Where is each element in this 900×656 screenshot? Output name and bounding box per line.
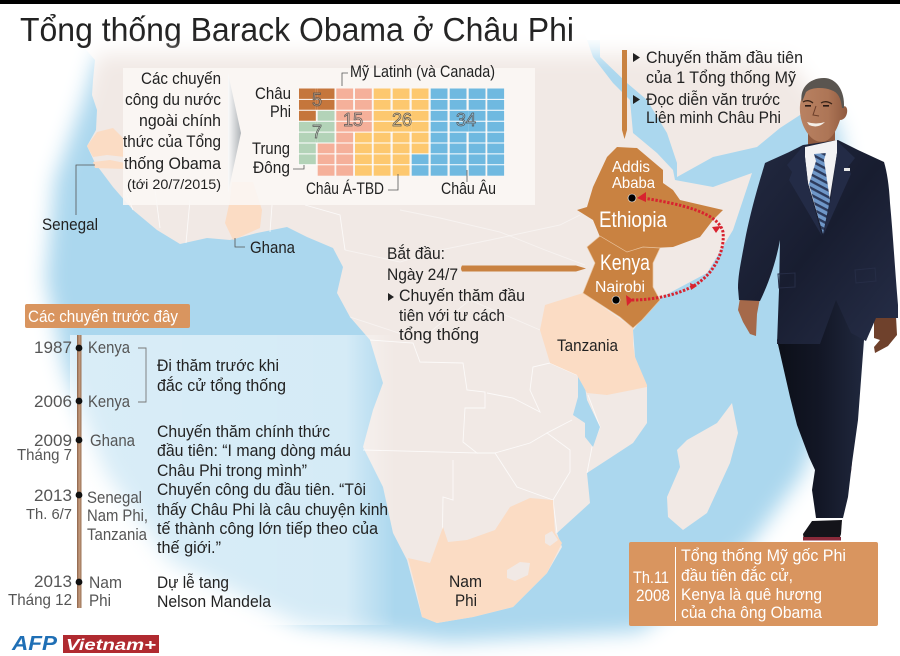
timeline: 2013 June-July: 2013 bbox=[34, 486, 72, 505]
label: Tanzania: Tanzania bbox=[557, 336, 618, 355]
label: Ghana bbox=[235, 238, 295, 257]
timeline: 2009 bbox=[17, 422, 351, 480]
head bbox=[800, 84, 847, 142]
timeline: 1987 and 2006: 2006 bbox=[34, 392, 72, 411]
chart intro text: Các chuyến bbox=[141, 69, 221, 88]
title: Tổng thống Barack Obama ở Châu Phi bbox=[20, 11, 574, 48]
chart intro text: ngoài chính bbox=[139, 111, 221, 130]
chart intro text: (tới 20/7/2015) bbox=[127, 176, 221, 192]
logo: Vietnam+ bbox=[63, 635, 159, 654]
Ethiopia and Kenya labels: Ethiopia bbox=[599, 207, 668, 232]
timeline: 2013 December: Phi bbox=[89, 591, 111, 610]
panel: previous trips background bbox=[70, 335, 395, 625]
panel: foreign trips chart: Châu Âu bbox=[441, 179, 496, 198]
callout: first African American president: của cha ông Obama bbox=[681, 603, 822, 622]
panel: foreign trips chart: Trung bbox=[252, 139, 290, 158]
timeline bbox=[8, 335, 388, 611]
note: Ethiopia first visit: của 1 Tổng thống Mỹ bbox=[646, 68, 796, 87]
country: Kenya bbox=[583, 236, 660, 328]
waffle numbers: 5 bbox=[312, 90, 322, 110]
country borders bbox=[125, 190, 600, 557]
chart intro text: thức của Tổng bbox=[123, 132, 221, 151]
hands bbox=[738, 298, 760, 336]
face details bbox=[803, 101, 832, 104]
label: Senegal: Senegal bbox=[42, 215, 98, 234]
timeline: 2013 December bbox=[8, 572, 271, 611]
waffle numbers: 26 bbox=[392, 110, 412, 130]
top black bar bbox=[0, 0, 900, 4]
note: Ethiopia first visit: Đọc diễn văn trước bbox=[646, 90, 780, 109]
neck bbox=[808, 126, 835, 150]
label: South Africa: Nam bbox=[449, 572, 482, 591]
note: Ethiopia first visit bbox=[633, 48, 803, 127]
lapel pin bbox=[844, 168, 850, 171]
route arrow: Nairobi to Addis Ababa bbox=[626, 192, 723, 306]
waffle numbers: 34 bbox=[456, 110, 476, 130]
Ethiopia and Kenya labels: Addis bbox=[612, 159, 650, 176]
timeline: 2013 June-July: Chuyến công du đầu tiên. “Tôi bbox=[157, 480, 366, 499]
land: Arabia bbox=[600, 42, 816, 177]
shirt bbox=[805, 140, 837, 233]
waffle numbers: 15 bbox=[343, 110, 363, 130]
hair bbox=[801, 78, 844, 108]
callout: first African American president: Th.11 bbox=[633, 568, 669, 587]
timeline: 2013 June-July: Nam Phi, bbox=[87, 506, 148, 525]
timeline: 2013 December: Nam bbox=[89, 573, 122, 592]
logo: Vietnam+: Vietnam+ bbox=[66, 637, 156, 654]
label: South Africa bbox=[449, 572, 482, 610]
chart intro text: thống Obama bbox=[124, 154, 222, 173]
timeline: 2009: Chuyến thăm chính thức bbox=[157, 422, 330, 441]
chart intro text bbox=[123, 69, 222, 192]
timeline: 2013 June-July bbox=[26, 480, 388, 557]
panel: foreign trips chart: Phi bbox=[270, 102, 291, 121]
callout: first African American president: 2008 bbox=[636, 586, 670, 605]
timeline: 1987 and 2006: Kenya bbox=[88, 338, 130, 357]
country: Tanzania bbox=[540, 293, 647, 395]
timeline: 2013 December: 2013 bbox=[34, 572, 72, 591]
timeline: 2013 December: Nelson Mandela bbox=[157, 592, 271, 611]
country: Ghana bbox=[225, 205, 262, 240]
timeline: 1987 and 2006: đắc cử tổng thống bbox=[157, 376, 286, 395]
lapels bbox=[787, 141, 855, 236]
arrow: to Addis Ababa bbox=[622, 50, 627, 139]
timeline: 2013 June-July: Tanzania bbox=[87, 525, 147, 544]
waffle numbers bbox=[312, 90, 476, 142]
lakes bbox=[573, 377, 600, 447]
tie bbox=[809, 153, 830, 234]
label: South Africa: Phi bbox=[455, 591, 477, 610]
note: Kenya start: Ngày 24/7 bbox=[387, 265, 458, 284]
country: South Africa bbox=[408, 498, 562, 623]
shoes bbox=[803, 520, 842, 540]
note: Kenya start: Chuyến thăm đầu bbox=[399, 286, 525, 305]
note: Kenya start: tiên với tư cách bbox=[399, 306, 505, 325]
label: Senegal bbox=[42, 165, 98, 234]
callout: first African American president: đầu tiên đắc cử, bbox=[681, 566, 793, 585]
timeline: 2013 December: Dự lễ tang bbox=[157, 573, 229, 592]
timeline: 1987 and 2006: Kenya bbox=[88, 392, 130, 411]
callout: first African American president bbox=[629, 542, 878, 626]
note: Kenya start: tổng thống bbox=[399, 325, 479, 344]
panel: foreign trips chart: Đông bbox=[253, 158, 290, 177]
timeline: 1987 and 2006 bbox=[34, 338, 286, 411]
panel: foreign trips chart bbox=[123, 62, 535, 205]
Ethiopia and Kenya labels bbox=[595, 159, 668, 304]
category labels: Châu bbox=[255, 84, 291, 103]
callout: first African American president: Tổng thống Mỹ gốc Phi bbox=[681, 546, 846, 565]
timeline: 1987 and 2006: 1987 bbox=[34, 338, 72, 357]
Ethiopia and Kenya labels: Ababa bbox=[612, 175, 655, 192]
note: Kenya start: Bắt đầu: bbox=[387, 244, 445, 263]
note: Ethiopia first visit: Liên minh Châu Phi bbox=[646, 108, 781, 127]
note: Kenya start bbox=[387, 244, 525, 344]
jacket bbox=[738, 140, 898, 344]
pockets bbox=[778, 268, 876, 288]
chart intro text: công du nước bbox=[125, 90, 221, 109]
country: Senegal bbox=[87, 128, 125, 169]
country: Ethiopia bbox=[577, 147, 723, 252]
land: Africa bbox=[60, 20, 752, 623]
timeline: 2009: Châu Phi trong mình” bbox=[157, 461, 307, 480]
Ethiopia and Kenya labels: Nairobi bbox=[595, 279, 645, 296]
arrow: start in Kenya bbox=[461, 266, 586, 272]
timeline: 2013 June-July: tế thành công lớn tiếp theo của bbox=[157, 519, 379, 538]
timeline: 2013 June-July: Senegal bbox=[87, 488, 142, 507]
Lesotho and Eswatini bbox=[507, 531, 558, 581]
timeline: 2013 June-July: Th. 6/7 bbox=[26, 506, 72, 523]
timeline: 2009: Ghana bbox=[90, 431, 135, 450]
callout: first African American president: Kenya là quê hương bbox=[681, 585, 822, 604]
trousers bbox=[777, 290, 864, 518]
timeline: 1987 and 2006: Đi thăm trước khi bbox=[157, 356, 279, 375]
timeline: 2013 December: Tháng 12 bbox=[8, 592, 72, 609]
Ethiopia and Kenya labels: Kenya bbox=[600, 250, 651, 275]
waffle chart bbox=[298, 88, 505, 176]
chevron arrow bbox=[228, 73, 241, 193]
timeline: 2009: Tháng 7 bbox=[17, 447, 72, 464]
land: Madagascar bbox=[667, 403, 738, 530]
panel: foreign trips chart: Châu Á-TBD bbox=[306, 179, 384, 198]
heading: previous trips: Các chuyến trước đây bbox=[28, 307, 178, 326]
timeline: 2009: đầu tiên: “I mang dòng máu bbox=[157, 441, 351, 460]
waffle numbers: 7 bbox=[312, 122, 322, 142]
note: Ethiopia first visit: Chuyến thăm đầu tiên bbox=[646, 48, 803, 67]
logo: AFP: AFP bbox=[11, 633, 58, 655]
photo illustration: Barack Obama bbox=[738, 78, 898, 540]
panel: foreign trips chart: Mỹ Latinh (và Canada) bbox=[350, 62, 495, 81]
timeline: 2013 June-July: thấy Châu Phi là câu chuyện kinh bbox=[157, 500, 388, 519]
label: Ghana: Ghana bbox=[250, 238, 295, 257]
timeline: 2013 June-July: thế giới.” bbox=[157, 538, 221, 557]
timeline: 2009: 2009 bbox=[34, 431, 72, 450]
